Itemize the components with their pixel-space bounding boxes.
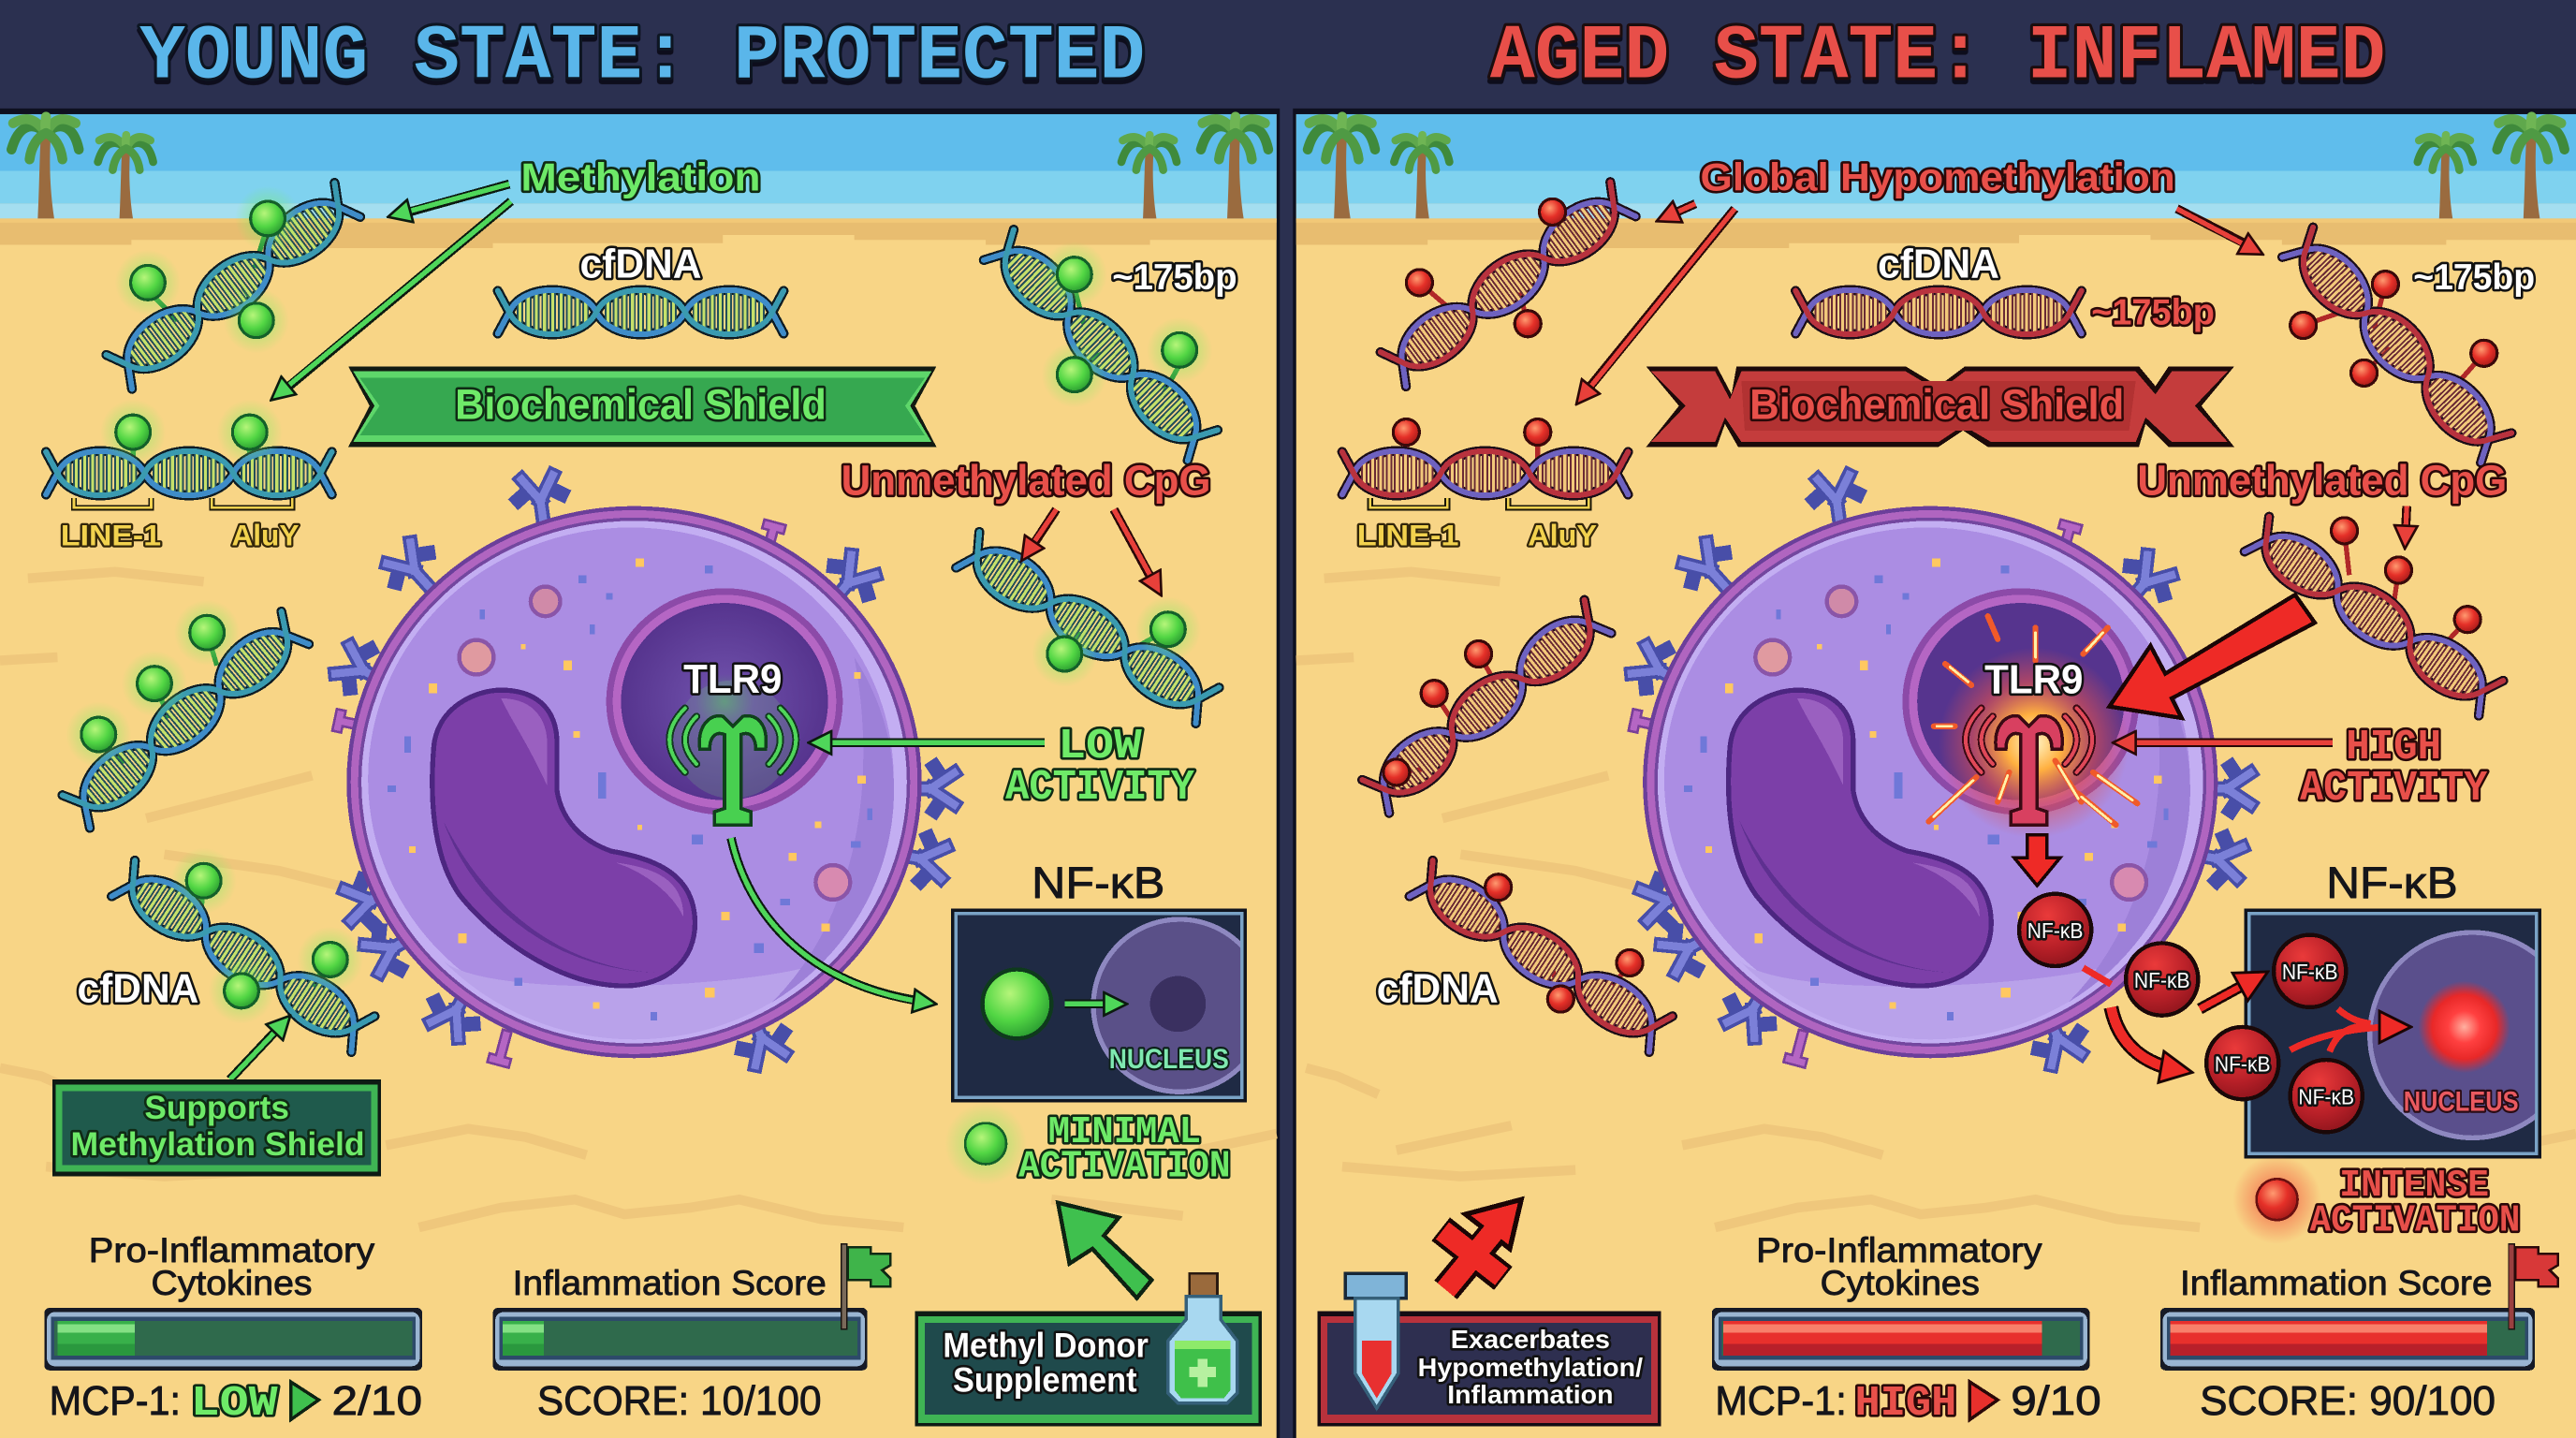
title: aged state: AGED STATE: INFLAMED (1490, 12, 2385, 100)
label: AluY: AluY (231, 519, 299, 552)
crossed arrow (1441, 1199, 1521, 1290)
label: methyl donor supplement (943, 1327, 1149, 1400)
glow dot: intense activation (2232, 1155, 2321, 1244)
dna fragment left middle (62, 600, 310, 829)
big red arrow (2110, 594, 2315, 718)
arrows from unmethylated CpG label (1025, 509, 1158, 590)
label: inflammation score: Inflammation Score (2180, 1264, 2492, 1302)
label: supports methylation shield: Methylation Shield (70, 1126, 365, 1163)
labels: NF-kB balls: NF-κB (2282, 960, 2338, 984)
label: exacerbates: Exacerbates (1451, 1325, 1610, 1354)
label: cytokines: Cytokines (151, 1264, 312, 1302)
NF-kB ball: inset top (2274, 935, 2346, 1007)
label: cytokines (89, 1231, 375, 1302)
labels: young panel text (50, 155, 1237, 1428)
icon: low indicator triangle (291, 1382, 318, 1419)
dash connector (2083, 968, 2111, 984)
label: AluY: AluY (1528, 519, 1597, 552)
NF-kB ball: at membrane (2126, 943, 2198, 1016)
bar: inflammation score (493, 1308, 868, 1371)
label: nucleus: NUCLEUS (1109, 1044, 1229, 1075)
label: NF-kB heading: NF-κB (1032, 858, 1164, 908)
value: 9/10: 9/10 (2011, 1378, 2101, 1424)
title: young state: YOUNG STATE: PROTECTED (139, 12, 1145, 100)
callout: methyl donor box (915, 1312, 1262, 1426)
dna fragment right middle (956, 531, 1220, 724)
label: cfDNA lower: cfDNA (77, 966, 198, 1012)
banner: biochemical shield (348, 366, 936, 447)
label: cytokines: Cytokines (1821, 1264, 1980, 1302)
glow dot: minimal activation (944, 1103, 1027, 1184)
label: TLR9: TLR9 (683, 656, 782, 702)
palm trees right (1121, 117, 1268, 218)
label: TLR9: TLR9 (1984, 657, 2083, 703)
dna fragment right middle (2244, 516, 2504, 716)
label: 175bp: ~175bp (1112, 257, 1237, 298)
dna fragment top right (983, 229, 1218, 461)
icon: methyl donor bottle (1168, 1273, 1237, 1403)
immune cell (332, 475, 954, 1067)
icon: green flag (842, 1244, 890, 1329)
labels: NF-kB balls: NF-κB (2027, 918, 2083, 943)
NF-kB ball: inset left (2206, 1027, 2278, 1099)
label: global hypomethylation: Global Hypomethylation (1701, 155, 2175, 199)
label: unmethylated CpG: Unmethylated CpG (842, 456, 1211, 504)
label: supports methylation shield (70, 1090, 365, 1163)
label: supports methylation shield: Supports (144, 1090, 289, 1126)
label: cfDNA: cfDNA (1878, 242, 1999, 287)
label: high activity: HIGH (2346, 723, 2441, 771)
label: LINE-1: LINE-1 (1357, 519, 1459, 552)
labels: NF-kB balls: NF-κB (2134, 968, 2190, 992)
NF-kB ball: inset bottom (2291, 1060, 2363, 1132)
label: low activity (1005, 722, 1195, 812)
arrows from methylation label (276, 184, 511, 396)
label: minimal activation (1018, 1111, 1231, 1189)
label: exacerbates: Hypomethylation/ (1418, 1353, 1643, 1382)
arrows: NF-kB translocation (2111, 979, 2395, 1070)
icon: blood test tube (1345, 1273, 1406, 1408)
curved arrow to NF-kB panel (731, 838, 929, 1003)
label: methyl donor supplement: Methyl Donor (943, 1327, 1149, 1365)
burst: TLR9 high activity (1928, 616, 2137, 838)
label: inflammation score: Inflammation Score (513, 1264, 827, 1302)
receptor: TLR9 low activity (669, 681, 796, 825)
label: exacerbates: Inflammation (1447, 1380, 1614, 1409)
receptor: TLR9 red (1966, 708, 2092, 825)
dna LINE-1 and AluY (1342, 419, 1628, 507)
label: 175bp center: ~175bp (2091, 293, 2215, 333)
inset: NF-kB minimal activation (951, 909, 1268, 1103)
label: nucleus: NUCLEUS (2404, 1086, 2519, 1117)
callout: supports shield box (52, 1020, 381, 1177)
labels: aged panel text (1357, 155, 2535, 1428)
bar: cytokines (1712, 1308, 2089, 1371)
label: NF-kB heading: NF-κB (2326, 858, 2458, 908)
dna fragment lower left (111, 848, 375, 1053)
label: cytokines: Pro-Inflammatory (89, 1231, 375, 1269)
labels: NF-kB balls (2027, 918, 2354, 1108)
label: high activity: ACTIVITY (2300, 764, 2488, 813)
arrow: to NF-kB (2014, 835, 2060, 886)
label: cytokines: Pro-Inflammatory (1756, 1231, 2042, 1269)
immune cell (1629, 475, 2250, 1067)
palm trees left (1308, 117, 1449, 218)
label: biochemical shield: Biochemical Shield (1749, 381, 2124, 429)
label: cfDNA: cfDNA (580, 242, 701, 287)
value: score: SCORE: 90/100 (2200, 1378, 2496, 1424)
pixel art: dna, arrows and callouts (1318, 182, 2576, 1426)
value: HIGH: HIGH (1855, 1379, 1956, 1428)
arrow: low activity (815, 741, 1045, 745)
dna fragment top left (106, 183, 360, 389)
pixel art: dna, arrows and callouts (44, 183, 1268, 1426)
inset: NF-kB intense activation (2245, 908, 2541, 1159)
panel backdrop: beach scene (1293, 109, 2576, 1438)
value: MCP-1: MCP-1: (1715, 1378, 1847, 1424)
label: unmethylated CpG: Unmethylated CpG (2137, 456, 2507, 504)
labels: NF-kB balls: NF-κB (2298, 1084, 2354, 1108)
label: minimal activation: MINIMAL (1048, 1111, 1201, 1154)
panel: aged state (1293, 109, 2576, 1438)
label: cytokines (1756, 1231, 2042, 1302)
label: LINE-1: LINE-1 (61, 519, 161, 552)
label: biochemical shield: Biochemical Shield (455, 381, 827, 429)
label: low activity: LOW (1058, 722, 1142, 770)
panel: young state (0, 109, 1280, 1438)
arrow from unmethylated CpG label (2405, 506, 2407, 542)
dna fragment center (498, 290, 783, 334)
label: methyl donor supplement: Supplement (953, 1361, 1137, 1400)
callout: exacerbates box (1318, 1312, 1661, 1426)
panel backdrop: beach scene (0, 109, 1280, 1438)
bar: inflammation score (2160, 1308, 2535, 1371)
bar: cytokines (44, 1308, 422, 1371)
banner: biochemical shield torn (1647, 366, 2234, 447)
value: MCP-1: MCP-1: (50, 1378, 181, 1424)
icon: high indicator triangle (1969, 1382, 1998, 1419)
arrow: high activity (2119, 741, 2333, 745)
dna fragment top right (2282, 227, 2512, 463)
label: minimal activation: ACTIVATION (1018, 1146, 1231, 1189)
label: exacerbates (1418, 1325, 1643, 1409)
NF-kB ball: cytoplasm (2019, 894, 2091, 966)
label: cfDNA lower: cfDNA (1377, 966, 1499, 1012)
label: intense activation (2310, 1165, 2520, 1243)
big arrow from supplement (1058, 1203, 1151, 1299)
label: 175bp: ~175bp (2413, 257, 2535, 298)
dna fragment lower left (1409, 859, 1673, 1053)
palm trees left (11, 117, 154, 218)
arrows from hypomethylation label (1580, 204, 2258, 399)
labels: NF-kB balls: NF-κB (2215, 1051, 2271, 1076)
dna fragment top left (1380, 182, 1636, 388)
label: low activity: ACTIVITY (1005, 763, 1195, 812)
value: score: SCORE: 10/100 (537, 1378, 822, 1424)
label: methylation: Methylation (520, 155, 761, 199)
dna fragment left middle (1362, 599, 1612, 814)
dna LINE-1 and AluY (46, 399, 332, 507)
label: intense activation: ACTIVATION (2310, 1200, 2520, 1243)
dna fragment center (1795, 290, 2082, 334)
value: 2/10: 2/10 (332, 1378, 422, 1424)
palm trees right (2418, 117, 2565, 218)
label: high activity (2300, 723, 2488, 813)
value: LOW: LOW (191, 1379, 278, 1428)
label: intense activation: INTENSE (2339, 1165, 2489, 1208)
icon: red flag (2509, 1244, 2558, 1329)
